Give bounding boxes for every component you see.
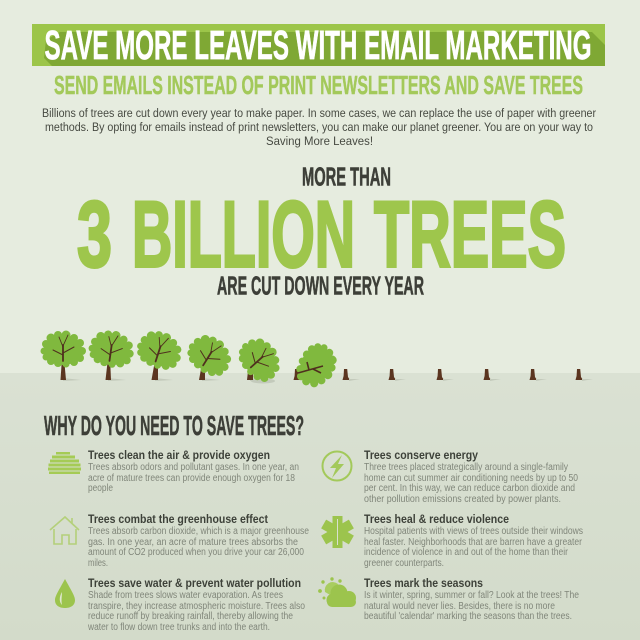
tree 2 [86,328,136,381]
item: mark the seasons [318,576,579,622]
description: per cent. In this way, we can reduce carbon dioxide and [364,483,575,494]
description: gas. In one year, an acre of mature trees absorbs the [88,537,298,548]
icon: lightning bolt [322,452,352,480]
3 billion trees: BILLION [132,182,355,286]
stump 5 [530,369,547,381]
stump 4 [484,369,501,381]
description: Trees absorb odors and pollutant gases. In one year, an [88,462,299,473]
headline statistic [77,164,566,300]
description: natural would never lies. Besides, there is no more [364,601,555,612]
description [364,462,578,505]
description: greener counterparts. [364,558,444,569]
description: heal faster. Neighborhoods that are barren have a greater [364,537,583,548]
icon: medical star [321,516,354,548]
description: other pollution emissions created by power plants. [364,494,561,505]
tree 3 [132,326,187,381]
heading: Trees save water & prevent water pollution [88,576,301,590]
are cut down every year: ARE CUT DOWN EVERY YEAR [217,272,424,300]
stump 1 [342,369,360,381]
description: Hospital patients with views of trees outside their windows [364,526,583,537]
item: greenhouse effect [50,512,309,569]
heading: Trees clean the air & provide oxygen [88,448,270,462]
description: Three trees placed strategically around a single-family [364,462,568,473]
more than: MORE THAN [302,164,391,192]
description: water to flow down tree trunks and into the earth. [87,622,270,633]
icon: air cloud [48,452,81,474]
icon: house [50,517,79,544]
icon: sun and cloud [318,577,356,607]
description: Trees absorb carbon dioxide, which is a major greenhouse [88,526,309,537]
description: reduce runoff by breaking rainfall, thereby allowing the [88,611,293,622]
description: amount of CO2 produced when you drive your car 26,000 [88,547,304,558]
tree 5 [231,330,289,389]
heading: Trees conserve energy [364,448,478,462]
tree 1 [40,330,86,381]
title banner [32,22,605,68]
heading: Trees combat the greenhouse effect [88,512,268,526]
description [88,526,309,569]
stump 3 [436,369,454,381]
item: conserve energy [322,448,578,505]
intro paragraph [42,106,596,148]
icon: water drop [55,579,75,608]
tree 4 [181,328,239,383]
description: incidence of violence in and out of the home than their [364,547,569,558]
falling trees illustration [40,326,593,394]
description: home can cut summer air conditioning needs by up to 50 [364,473,578,484]
heading: Trees mark the seasons [364,576,483,590]
stump 2 [388,369,406,381]
ground band [0,373,640,640]
description: miles. [88,558,108,569]
3 billion trees: 3 [77,182,112,286]
item: clean air [48,448,299,494]
description [87,590,305,633]
description: beautiful 'calendar' marking the seasons than the trees. [364,611,572,622]
description [88,462,299,494]
heading: Trees heal & reduce violence [364,512,509,526]
description [364,590,579,622]
description: acre of mature trees can provide enough oxygen for 18 [88,473,295,484]
description: transpire, they increase atmospheric moisture. Trees also [88,601,305,612]
description: Shade from trees slows water evaporation. As trees [88,590,283,601]
description: Is it winter, spring, summer or fall? Look at the trees! The [364,590,579,601]
intro paragraph: Saving More Leaves! [266,134,373,148]
section heading: WHY DO YOU NEED TO SAVE TREES? [44,410,304,441]
description: people [88,483,113,494]
stump 6 [576,369,593,381]
description [364,526,583,569]
tree 6 falling [290,337,344,394]
item: save water [55,576,305,633]
item: heal and reduce violence [321,512,583,569]
